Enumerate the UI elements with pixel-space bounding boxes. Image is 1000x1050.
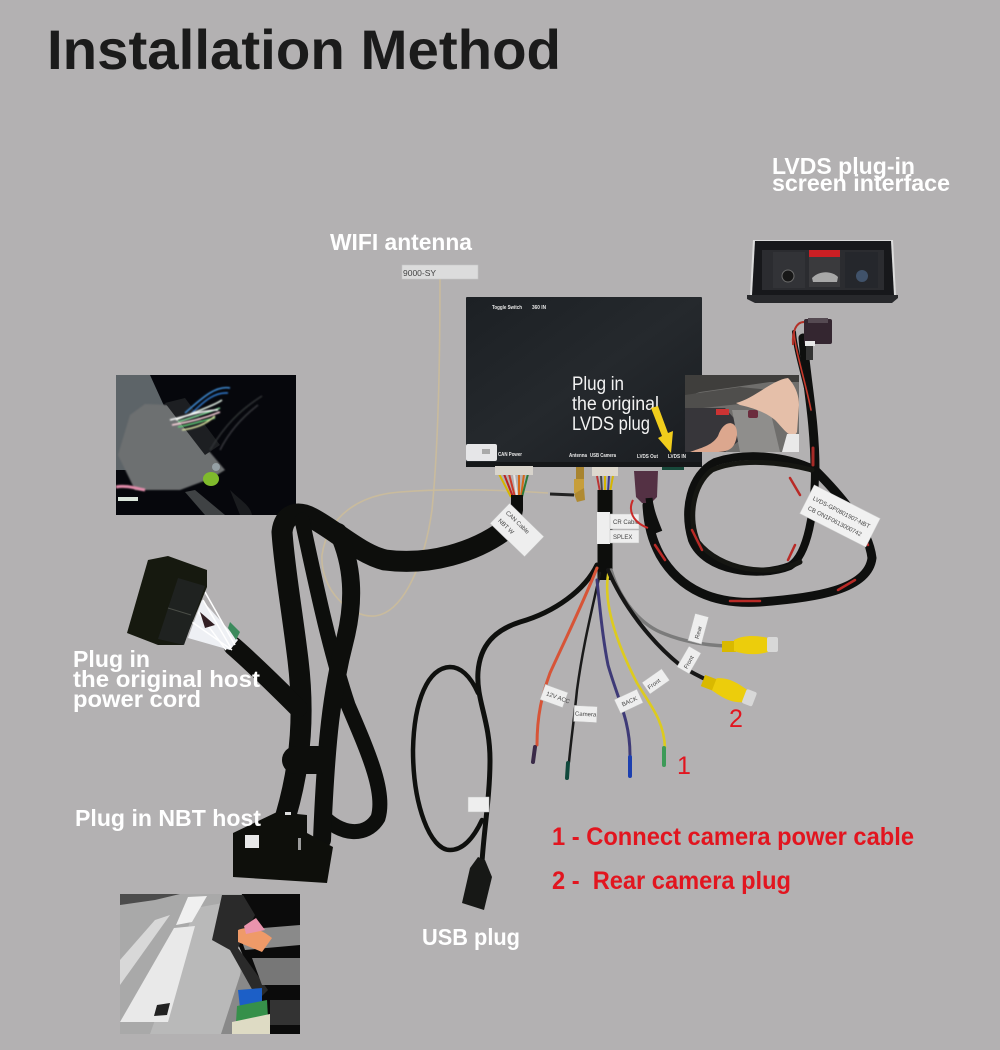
wire tags: Front	[647, 678, 662, 691]
wire tags: BACK	[621, 696, 639, 708]
right harness to screen with red stripes	[647, 332, 872, 602]
CAN connector and wires	[495, 466, 533, 535]
antenna connector	[550, 467, 585, 502]
photo: hands plugging LVDS	[685, 375, 799, 452]
number 1: 1	[677, 752, 691, 780]
black camera wire	[608, 570, 705, 679]
box port labels: LVDS Out	[637, 454, 658, 460]
camera cable labels	[610, 514, 640, 543]
label: plug in the original LVDS plug: Plug in	[572, 374, 624, 395]
wire tags: Camera	[575, 711, 597, 719]
harness label tag: CAN Cable	[504, 510, 530, 536]
LVDS screen connector	[793, 318, 832, 360]
camera cable labels: SPLEX	[613, 535, 632, 541]
main module box	[466, 297, 702, 467]
thin black wire	[569, 573, 600, 762]
wire tips	[533, 747, 664, 778]
right harness label: CB ON1F0613000742	[806, 506, 863, 539]
fan-out wires	[413, 565, 725, 862]
label: plug in the original host power cord: the original host	[73, 666, 260, 692]
label: plug in the original host power cord: power cord	[73, 686, 201, 712]
legend: rear camera plug: 2 - Rear camera plug	[552, 867, 791, 895]
WIFI antenna patch and wire	[322, 265, 548, 616]
USB plug	[462, 857, 492, 910]
label: LVDS plug-in screen interface	[772, 153, 950, 196]
photo: NBT host unit	[120, 894, 300, 1034]
USB black cable	[478, 565, 597, 862]
label: USB plug: USB plug	[422, 924, 520, 950]
box port labels: Antenna	[569, 453, 587, 459]
label: plug in the original host power cord	[73, 646, 260, 712]
harness label tag: NBT W	[496, 518, 515, 536]
label: plug in the original LVDS plug	[572, 374, 659, 435]
photo: dark car wiring	[116, 375, 296, 515]
screen interface display	[747, 240, 898, 303]
harness label tag	[490, 503, 544, 557]
orange wire	[537, 568, 597, 745]
wire tags	[468, 613, 709, 812]
NBT host connector	[233, 812, 333, 883]
number 2: 2	[729, 705, 743, 733]
right harness label	[800, 485, 880, 547]
WIFI antenna patch and wire: 9000-SY	[403, 268, 436, 278]
label: plug in the original host power cord: Plug in	[73, 646, 150, 672]
box port labels: Toggle Switch	[492, 305, 522, 311]
wire tags: Front	[684, 655, 696, 670]
LVDS out connector	[631, 467, 684, 532]
camera cable labels: CR Cable	[613, 520, 640, 526]
box port labels: 360 IN	[532, 305, 546, 311]
yellow wire	[607, 570, 665, 748]
box port labels	[492, 305, 686, 460]
box port labels: USB Camera	[590, 453, 616, 459]
navy wire	[597, 580, 630, 755]
label: WIFI antenna: WIFI antenna	[330, 229, 473, 255]
wire tags: Rear	[695, 626, 704, 640]
main harness: thick black bundle	[233, 514, 505, 840]
label: plug in the original LVDS plug: LVDS plug	[572, 414, 650, 435]
yellow arrow to LVDS IN	[651, 406, 673, 453]
label: plug in the original LVDS plug: the original	[572, 394, 659, 415]
box port labels: LVDS IN	[668, 454, 686, 460]
RCA plug: front camera black	[700, 671, 758, 709]
label: LVDS plug-in screen interface: screen interface	[772, 170, 950, 196]
title: Installation Method	[47, 18, 561, 81]
wire tags: 12V ACC	[545, 691, 571, 706]
legend: connect camera power cable: 1 - Connect camera power cable	[552, 823, 914, 851]
USB cable loop	[413, 667, 482, 850]
grey camera wire	[611, 570, 725, 646]
box port labels: CAN Power	[498, 452, 522, 458]
host power connector	[127, 556, 240, 650]
label: LVDS plug-in screen interface: LVDS plug-in	[772, 153, 915, 179]
right harness label: LVDS-GP0801907-NBT	[811, 496, 871, 530]
label: plug in NBT host: Plug in NBT host	[75, 805, 261, 831]
RCA plug: rear camera grey	[722, 636, 778, 654]
USB camera connector and bundle	[592, 467, 618, 580]
